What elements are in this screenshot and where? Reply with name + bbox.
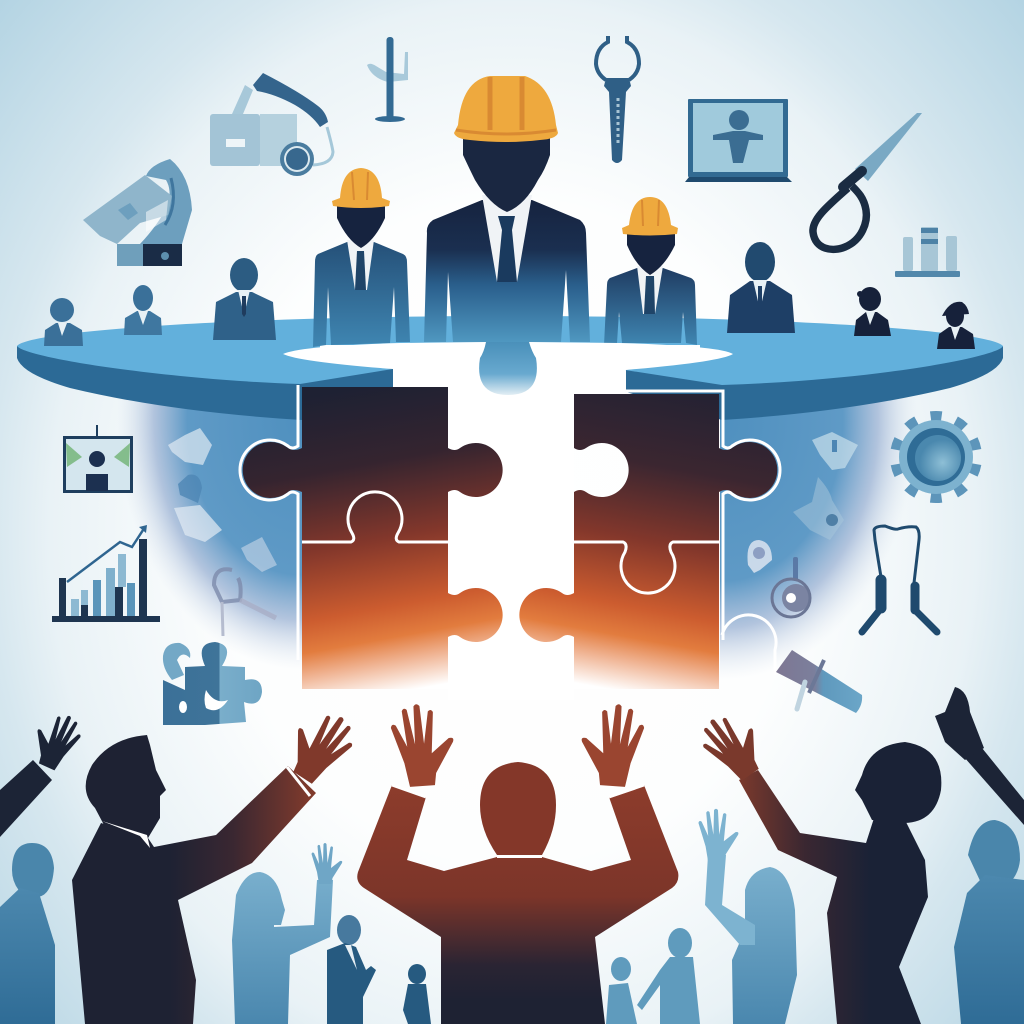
puzzle piece left (240, 385, 503, 689)
main person with helmet (424, 76, 590, 342)
icon: camera machine (210, 73, 333, 176)
person with helmet left (313, 168, 410, 347)
platform top (17, 316, 1003, 385)
tiny person (403, 964, 431, 1024)
icon: clamp tool (596, 36, 639, 163)
person small far left (44, 298, 83, 346)
man left raising arm (72, 701, 362, 1024)
icon: monitor (64, 425, 132, 492)
icon: post tool (367, 37, 408, 122)
person small 3 (213, 258, 276, 340)
blue man far right (954, 820, 1024, 1024)
mist left (110, 380, 302, 680)
puzzle stem (479, 342, 537, 395)
children silhouettes (606, 928, 700, 1024)
person with helmet right (604, 197, 697, 345)
person small 2 (124, 285, 162, 335)
far left arm (0, 707, 86, 837)
platform side right (626, 346, 1003, 420)
ghost icons left (168, 428, 277, 636)
icon: laptop (685, 99, 792, 182)
center man with raised hands (357, 702, 678, 1024)
icon: stethoscope (862, 526, 937, 632)
icon: microscope (83, 159, 192, 266)
person right 2 (854, 287, 891, 336)
person right 1 (727, 242, 795, 333)
icon: brush tool (722, 615, 862, 713)
puzzle piece right (519, 391, 780, 689)
platform side left (17, 346, 393, 420)
person right 3 (937, 302, 975, 349)
platform gap white (283, 342, 733, 700)
mist right (720, 380, 925, 680)
far right arm (935, 687, 1024, 825)
blue man far left (0, 843, 55, 1024)
light blue woman left (232, 843, 342, 1024)
small man dark blue (327, 915, 376, 1024)
icon: scalpel with loop (813, 113, 922, 249)
icon: bottles (895, 227, 960, 277)
icon: gear (889, 410, 983, 504)
icon: small puzzle piece (163, 642, 262, 725)
woman right raising arm (693, 704, 941, 1024)
ghost icons right (747, 432, 858, 617)
bar chart icon (52, 525, 160, 622)
light blue woman right (698, 809, 797, 1024)
